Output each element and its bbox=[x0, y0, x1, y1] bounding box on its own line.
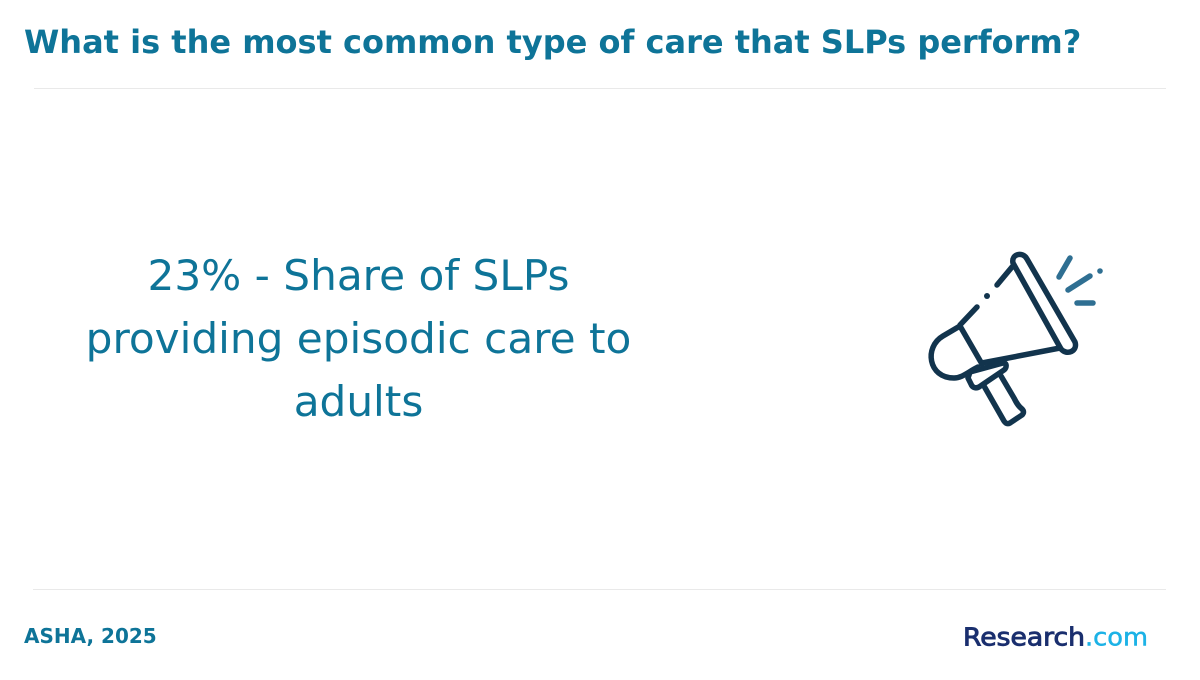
main statistic text bbox=[86, 251, 631, 426]
main statistic text: 23% - Share of SLPs bbox=[148, 251, 570, 300]
source: ASHA, 2025 bbox=[24, 624, 157, 648]
logo: Research.com: Research bbox=[963, 622, 1085, 652]
main statistic text: adults bbox=[294, 377, 423, 426]
icon: megaphone bbox=[928, 252, 1103, 426]
logo: Research.com: .com bbox=[1085, 622, 1148, 652]
main statistic text: providing episodic care to bbox=[86, 314, 631, 363]
logo: Research.com bbox=[963, 622, 1148, 652]
title: What is the most common type of care that SLPs perform? bbox=[24, 23, 1081, 61]
